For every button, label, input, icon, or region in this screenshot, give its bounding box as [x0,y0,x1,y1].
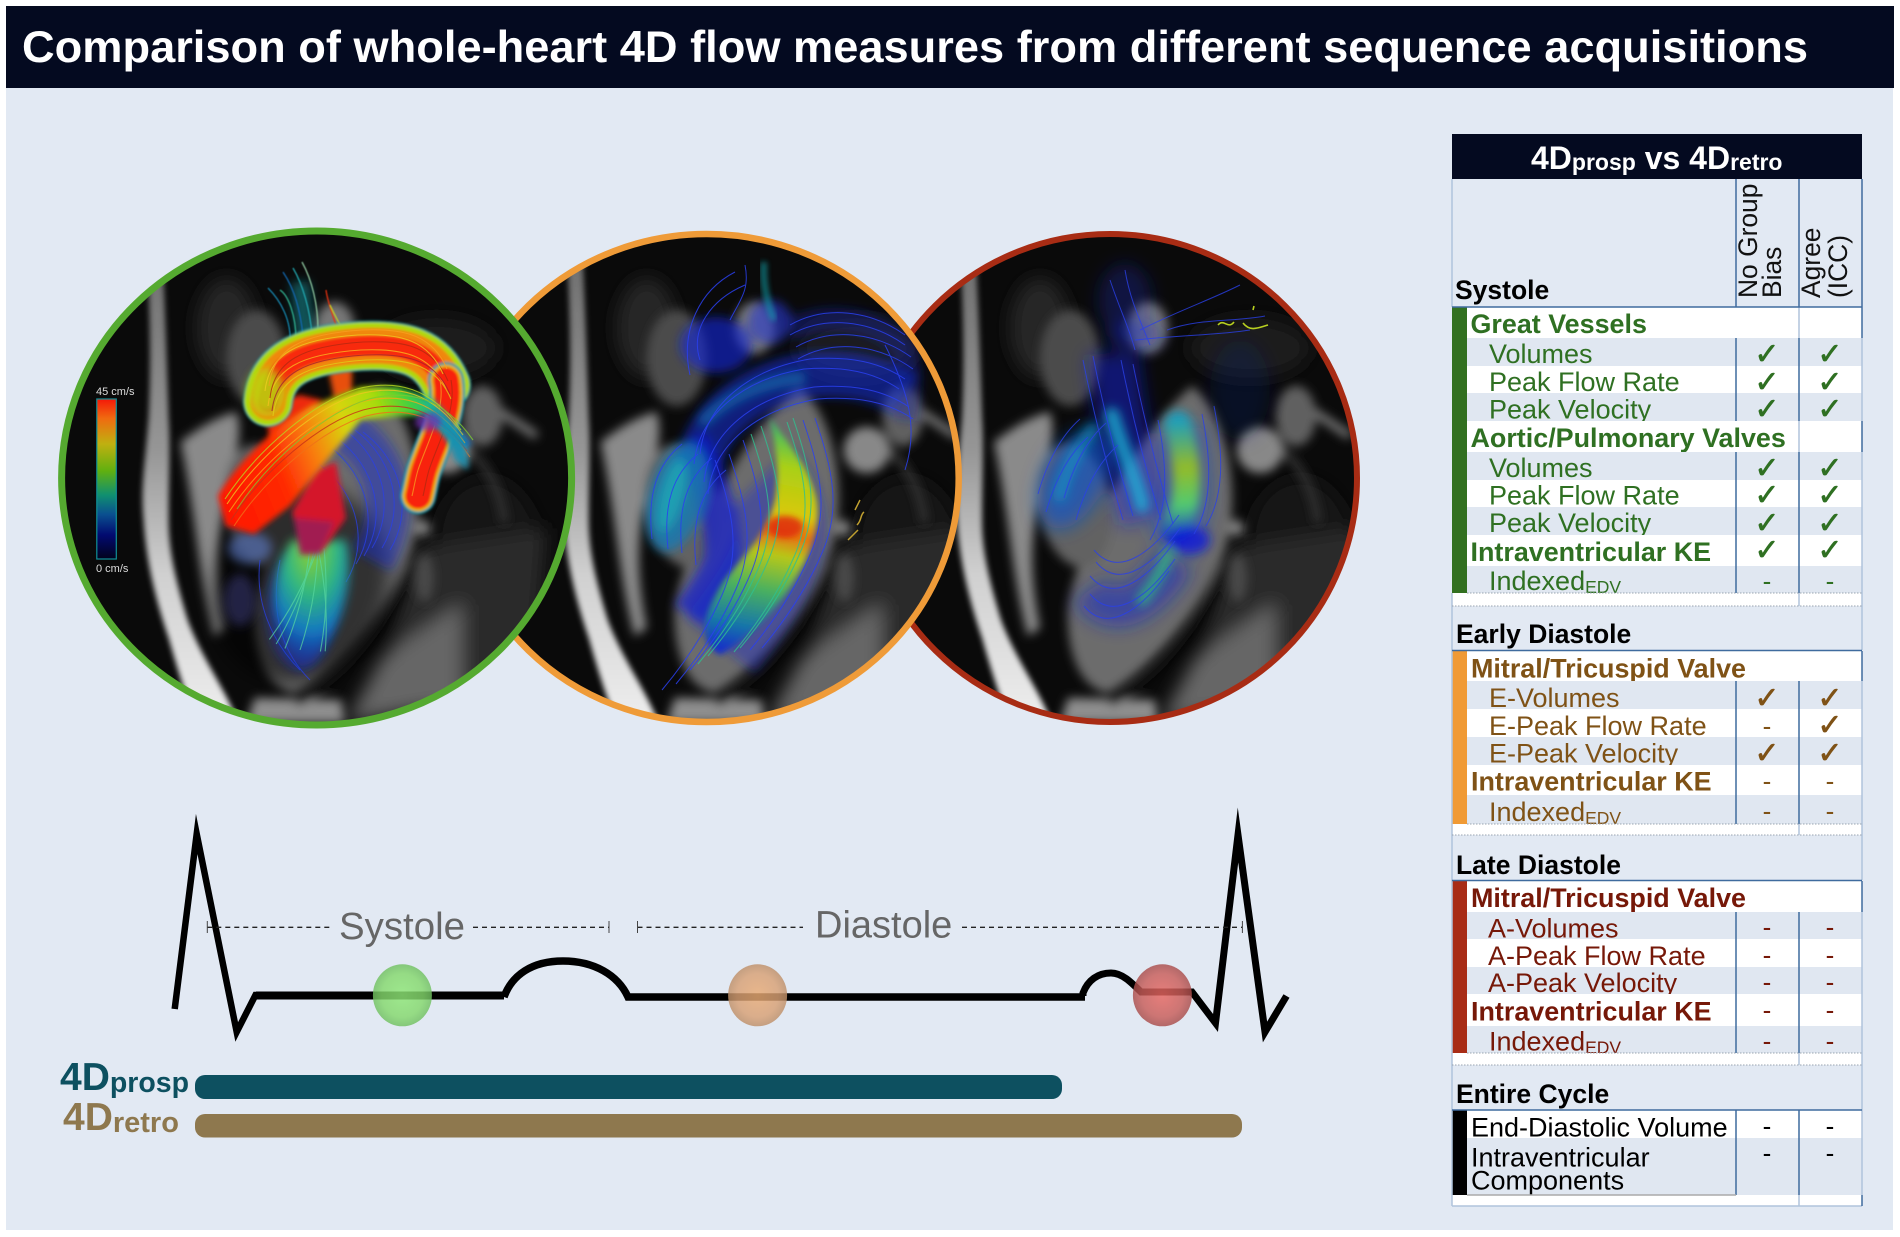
section: early diastole rows: Indexed [1489,797,1585,827]
table header: retro [1730,149,1782,175]
diastole span with label [638,905,1242,947]
section: early diastole rows: - [1763,766,1771,796]
fan of flow below the valve [274,540,349,672]
section: early diastole rows: E-Peak Flow Rate [1489,711,1707,741]
ECG trace [175,834,1287,1032]
results table [1452,134,1862,1206]
section: systole rows: ✓ [1817,365,1843,400]
panel: systole 4D flow image [58,228,576,728]
column header: no group bias: Bias [1757,247,1787,298]
table header [1452,134,1862,179]
section: early diastole rows: ✓ [1754,736,1780,771]
title bar: Comparison of whole-heart 4D flow measures from different sequence acquisitions [22,23,1808,72]
section: early diastole rows: - [1763,796,1771,826]
section: systole rows: ✓ [1754,365,1780,400]
section: early diastole rows: - [1763,711,1771,741]
marker: late diastole phase [1133,964,1192,1026]
column header: no group bias: No Group [1733,184,1763,298]
marker: early diastole phase [728,964,787,1026]
section: systole rows: ✓ [1817,392,1843,427]
title bar [6,6,1894,88]
section: entire cycle rows: - [1763,1111,1771,1141]
panel: late diastole 4D flow image [910,231,1360,725]
section: early diastole rows: ✓ [1817,736,1843,771]
red jet behind the arches [262,364,352,555]
section: early diastole rows: ✓ [1817,681,1843,716]
section: systole rows: ✓ [1754,392,1780,427]
acquisition bar: 4D prospective [60,1056,1062,1099]
section: systole rows: Peak Flow Rate [1489,480,1680,510]
section: late diastole rows: Indexed [1489,1026,1585,1056]
systole span with label [207,906,609,948]
section: late diastole rows: EDV [1585,1038,1621,1058]
acquisition bar: 4D prospective: prosp [110,1067,189,1099]
section heading: entire cycle: Entire Cycle [1456,1079,1609,1109]
section heading: late diastole: Late Diastole [1456,850,1621,880]
section: systole rows: ✓ [1754,478,1780,513]
velocity colour bar: 0 cm/s [96,563,129,575]
acquisition bar: 4D retrospective: retro [113,1107,179,1139]
section: late diastole rows: - [1826,967,1834,997]
systole span with label: Systole [339,906,465,948]
section: systole rows: Indexed [1489,566,1585,596]
section: entire cycle rows: End-Diastolic Volume [1471,1112,1728,1142]
section: systole rows: ✓ [1754,506,1780,541]
section: late diastole rows: - [1763,940,1771,970]
fine fibres above the arches [267,261,340,337]
upper great-vessel arch [268,346,447,496]
section heading: systole: Systole [1455,275,1549,305]
circle outline: late diastole [863,234,1357,722]
velocity colour bar: 45 cm/s [96,386,135,398]
section: early diastole rows: E-Peak Velocity [1489,738,1679,768]
section: systole rows: Intraventricular KE [1470,537,1711,567]
section: entire cycle rows: Intraventricular [1471,1142,1650,1172]
section: entire cycle rows: - [1826,1111,1834,1141]
column header: agreement: Agree [1796,228,1826,298]
section: early diastole rows: - [1826,766,1834,796]
section: systole rows: - [1826,566,1834,596]
section: early diastole rows: - [1826,796,1834,826]
marker: systole phase [373,964,432,1026]
section: systole rows: ✓ [1817,337,1843,372]
circle outline: systole [62,231,572,725]
section: entire cycle rows [1452,1110,1862,1206]
section: early diastole rows: E-Volumes [1489,683,1620,713]
section: late diastole rows: - [1763,967,1771,997]
section: late diastole rows [1452,881,1862,1077]
acquisition bar: 4D retrospective: 4D [63,1096,113,1139]
section: late diastole rows: A-Peak Velocity [1488,968,1678,998]
section: early diastole rows: ✓ [1754,681,1780,716]
section: late diastole rows: Mitral/Tricuspid Valve [1471,883,1746,913]
section: late diastole rows: - [1763,912,1771,942]
acquisition bar: 4D retrospective [63,1096,1242,1139]
section: early diastole rows: Mitral/Tricuspid Valve [1471,654,1746,684]
section: systole rows: Great Vessels [1470,309,1647,339]
section: early diastole rows [1452,651,1862,847]
section: systole rows: - [1763,566,1771,596]
table header: prosp [1572,149,1636,175]
section: systole rows: Peak Velocity [1489,508,1652,538]
main inflow jet [705,418,818,655]
table rules [1452,179,1862,1206]
section: systole rows: Peak Flow Rate [1489,367,1680,397]
table header: vs 4D [1636,140,1730,176]
section: systole rows: EDV [1585,577,1621,597]
velocity colour bar [96,386,135,575]
section: late diastole rows: - [1826,940,1834,970]
diastole span with label: Diastole [815,905,952,947]
section: late diastole rows: Intraventricular KE [1471,996,1712,1026]
section: late diastole rows: - [1826,912,1834,942]
section: entire cycle rows: Components [1471,1166,1624,1196]
section: systole rows: ✓ [1817,533,1843,568]
section: systole rows: ✓ [1754,533,1780,568]
section: systole rows: ✓ [1754,337,1780,372]
section: late diastole rows: - [1763,1026,1771,1056]
section: early diastole rows: EDV [1585,808,1621,828]
section: systole rows: ✓ [1817,451,1843,486]
section: late diastole rows: - [1763,995,1771,1025]
section: late diastole rows: - [1826,995,1834,1025]
panel: early diastole 4D flow image [514,230,962,726]
section: systole rows: Volumes [1489,339,1593,369]
section: systole rows: ✓ [1817,506,1843,541]
circle outline: early diastole [455,234,959,722]
section: late diastole rows: - [1826,1026,1834,1056]
section: entire cycle rows: - [1826,1138,1834,1168]
table header: 4D [1531,140,1572,176]
lower great-vessel arch [218,387,472,534]
section: late diastole rows: A-Peak Flow Rate [1488,941,1706,971]
section: systole rows: ✓ [1754,451,1780,486]
column header: agreement: (ICC) [1823,235,1853,298]
section: systole rows [1452,307,1862,618]
section: systole rows: Volumes [1489,453,1593,483]
section: systole rows: Peak Velocity [1489,394,1652,424]
section: late diastole rows: A-Volumes [1488,914,1619,944]
section: systole rows: ✓ [1817,478,1843,513]
section heading: early diastole: Early Diastole [1456,619,1631,649]
section: early diastole rows: Intraventricular KE [1471,766,1712,796]
section: early diastole rows: ✓ [1817,708,1843,743]
acquisition bar: 4D prospective: 4D [60,1056,110,1099]
section: entire cycle rows: - [1763,1138,1771,1168]
section: systole rows: Aortic/Pulmonary Valves [1470,423,1786,453]
